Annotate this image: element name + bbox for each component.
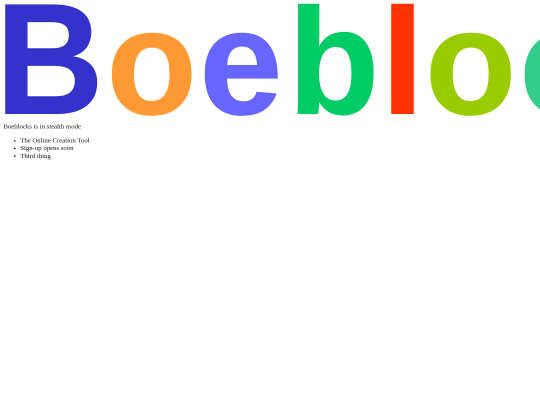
bullet list: feature notes [14,137,90,160]
bullet list: feature notes: Third thing [20,152,51,159]
bullet list: feature notes: The Online Creation Tool [20,137,90,144]
title: Boeblocks multicoloured wordmark [0,0,540,125]
text block: stealth mode tagline: Boeblocks is in stealth mode [3,123,81,130]
bullet list: feature notes: Sign-up opens soon [20,145,74,152]
